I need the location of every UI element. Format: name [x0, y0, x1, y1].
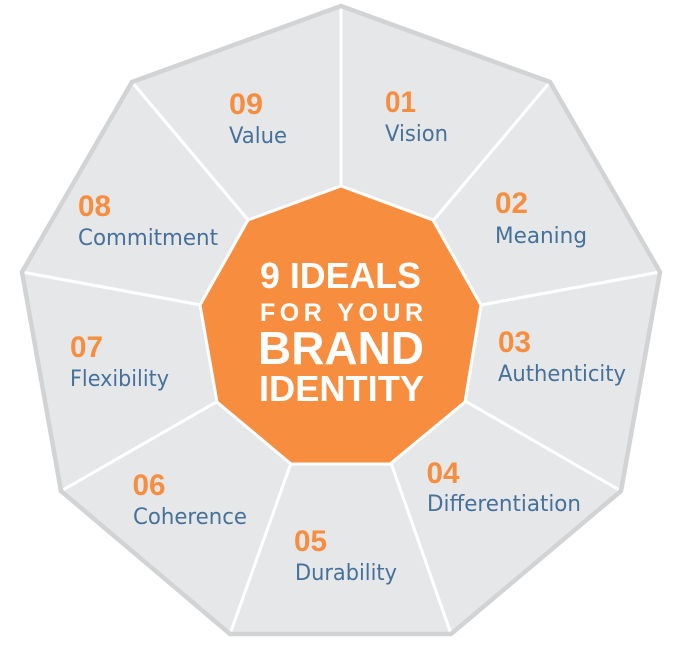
segment 05: Durability: 05	[294, 525, 327, 558]
center title: BRAND	[258, 322, 424, 374]
segment 03: Authenticity: 03	[498, 326, 531, 359]
segment 06: Coherence: 06	[132, 469, 166, 502]
segment 01: Vision: Vision	[385, 121, 448, 147]
segment 06: Coherence: Coherence	[133, 504, 247, 530]
segment 08: Commitment	[22, 82, 249, 305]
segment 08: Commitment: 08	[78, 190, 111, 223]
center badge	[200, 186, 481, 464]
segment 05: Durability	[230, 463, 451, 634]
segment 09: Value	[132, 6, 341, 221]
segment 07: Flexibility: Flexibility	[70, 366, 169, 392]
segment 09: Value: 09	[229, 88, 263, 121]
segment 04: Differentiation: Differentiation	[427, 491, 581, 517]
segment 01: Vision	[341, 6, 550, 221]
segment 02: Meaning: 02	[495, 187, 528, 220]
segment 01: Vision: 01	[385, 86, 416, 119]
segment 02: Meaning	[433, 82, 660, 305]
segment 08: Commitment: Commitment	[78, 225, 218, 251]
segment 05: Durability: Durability	[295, 560, 397, 586]
segment 06: Coherence	[61, 401, 291, 634]
segment 04: Differentiation: 04	[426, 457, 460, 490]
segment 03: Authenticity: Authenticity	[498, 361, 626, 387]
segment 09: Value: Value	[229, 123, 287, 149]
center title	[258, 255, 424, 409]
segment 07: Flexibility: 07	[70, 331, 103, 364]
segment 04: Differentiation	[391, 401, 621, 634]
center title: IDENTITY	[259, 368, 424, 409]
segment 07: Flexibility	[22, 272, 218, 491]
segment 03: Authenticity	[465, 272, 660, 491]
center title: FOR YOUR	[260, 299, 423, 327]
segment 02: Meaning: Meaning	[495, 223, 587, 249]
center title: 9 IDEALS	[260, 255, 421, 296]
